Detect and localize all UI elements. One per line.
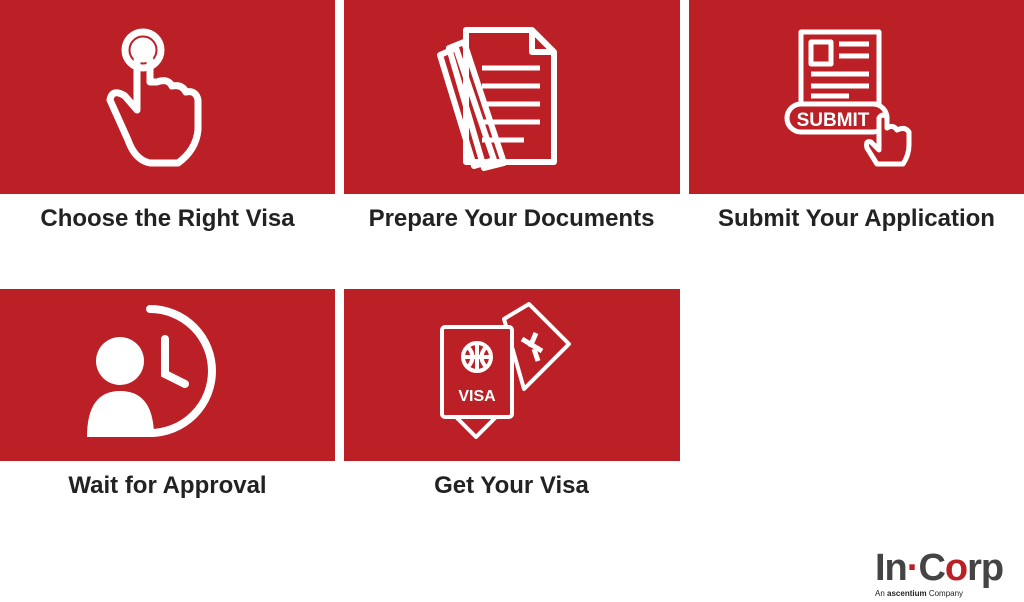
- icon: submit form: SUBMIT: [797, 110, 870, 131]
- panel: choose visa: [0, 0, 335, 194]
- label: wait: Wait for Approval: [68, 472, 267, 499]
- icon: pointing hand: [106, 28, 202, 166]
- logo: In·Corp: [875, 547, 1003, 589]
- logo: An ascentium Company: [875, 589, 963, 598]
- icon: passport visa: [440, 302, 572, 440]
- label: submit: Submit Your Application: [718, 205, 995, 232]
- label: prepare: Prepare Your Documents: [369, 205, 654, 232]
- icon: submit form: [784, 30, 912, 166]
- icon: passport visa: VISA: [458, 388, 496, 405]
- panel: wait: [0, 289, 335, 461]
- panel: get visa: [344, 289, 680, 461]
- label: choose: Choose the Right Visa: [40, 205, 295, 232]
- icon: documents: [437, 27, 557, 171]
- label: get visa: Get Your Visa: [434, 472, 589, 499]
- panel: submit: [689, 0, 1024, 194]
- panel: prepare docs: [344, 0, 680, 194]
- icon: person clock: [87, 305, 216, 437]
